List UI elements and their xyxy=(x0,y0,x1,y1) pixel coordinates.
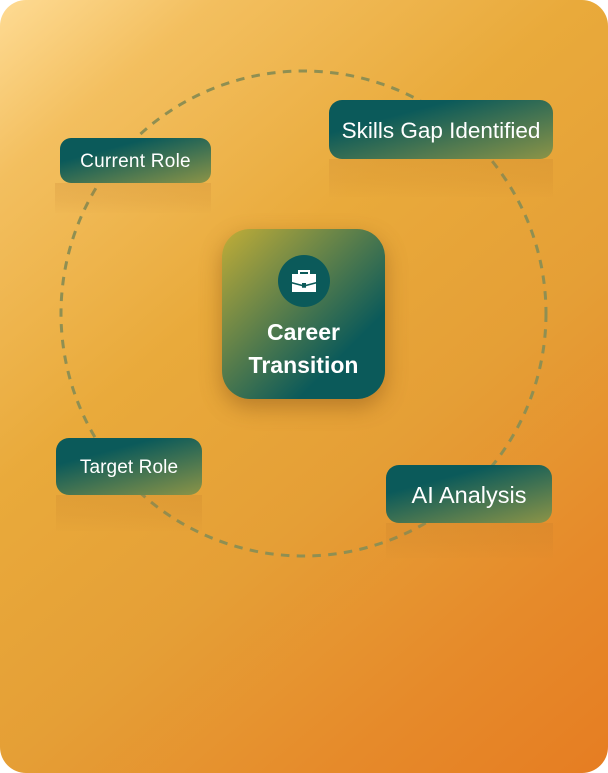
hub label: Transition xyxy=(249,352,358,378)
node: Current Role: Current Role xyxy=(80,150,191,172)
node: Skills Gap Identified: Skills Gap Identified xyxy=(342,118,540,142)
node: Skills Gap Identified xyxy=(329,100,553,159)
central hub: Career Transition xyxy=(222,229,385,399)
hub label: Career xyxy=(267,319,340,345)
node: AI Analysis: AI Analysis xyxy=(412,482,526,508)
shadow: AI analysis xyxy=(386,523,553,558)
icon: briefcase xyxy=(278,255,330,307)
node: Current Role xyxy=(60,138,211,183)
node: Target Role: Target Role xyxy=(80,456,178,478)
node: Target Role xyxy=(56,438,202,495)
shadow: current role xyxy=(55,183,211,213)
node: AI Analysis xyxy=(386,465,552,523)
shadow: skills gap xyxy=(329,159,553,197)
shadow: target role xyxy=(56,495,202,531)
hub label xyxy=(248,319,358,378)
